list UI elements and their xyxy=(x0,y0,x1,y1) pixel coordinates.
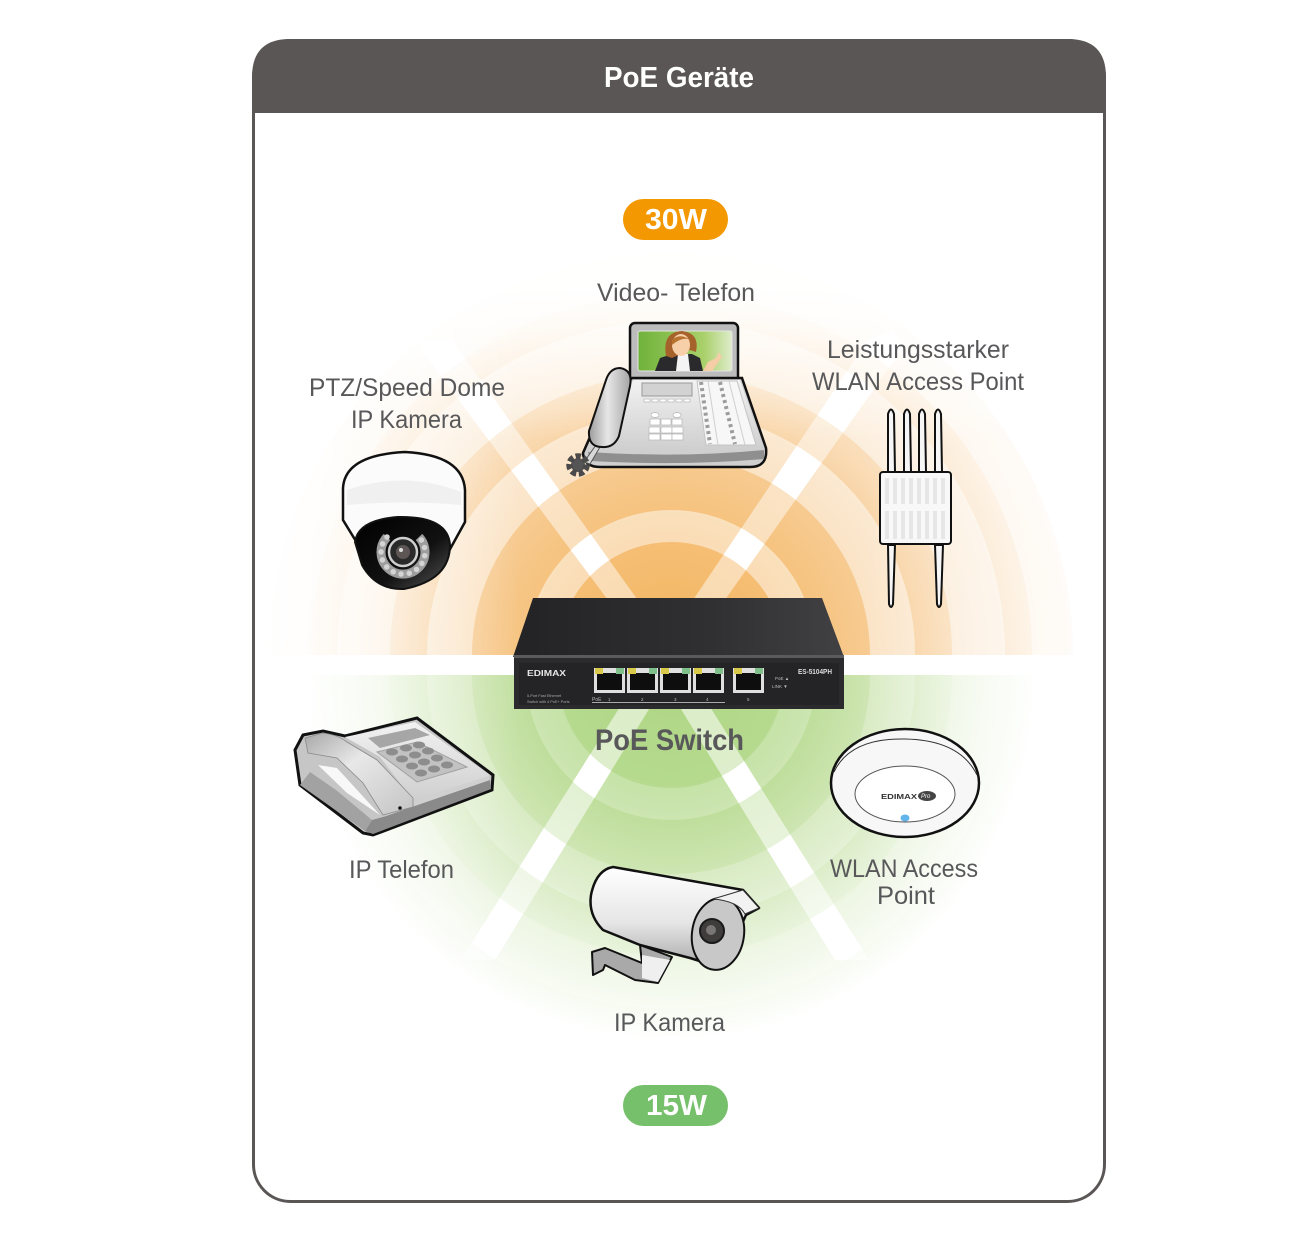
icon: PoE switch: PoE ▲ xyxy=(775,676,789,681)
label: PTZ/Speed Dome IP Kamera: IP Kamera xyxy=(351,406,462,434)
label: PTZ/Speed Dome IP Kamera xyxy=(309,374,505,434)
icon: ceiling WLAN access point xyxy=(831,729,979,837)
label: IP Telefon: IP Telefon xyxy=(349,856,454,884)
badge: 15W: 15W xyxy=(646,1090,708,1122)
title: PoE Geräte xyxy=(604,62,754,94)
panel: outer border xyxy=(254,40,1104,1202)
icon: PoE switch: 2 xyxy=(641,697,644,702)
label: Leistungsstarker WLAN Access Point: Leistungsstarker xyxy=(827,336,1009,364)
infographic: PoE Geräte xyxy=(252,39,1106,1203)
panel: PoE Geräte background xyxy=(254,40,1104,1202)
label: Leistungsstarker WLAN Access Point: WLAN Access Point xyxy=(812,368,1024,396)
icon: PoE switch: 5 xyxy=(747,697,750,702)
badge: 30W: 30W xyxy=(645,204,708,236)
badge: 15W xyxy=(623,1085,728,1126)
icon: outdoor high power access point xyxy=(880,410,951,607)
icon: PoE switch: 5-Port Fast Ethernet xyxy=(527,694,562,698)
icon: PoE switch: 4 xyxy=(706,697,709,702)
label: WLAN Access Point: WLAN Access xyxy=(830,855,978,883)
icon: bullet IP camera xyxy=(590,867,759,983)
icon: IP telephone xyxy=(295,718,493,835)
label: PoE Switch: PoE Switch xyxy=(595,724,744,757)
icon: PoE switch xyxy=(513,598,844,709)
icon: ceiling WLAN access point: Pro xyxy=(921,794,931,800)
icon: ceiling WLAN access point: EDIMAX xyxy=(881,794,917,801)
badge: 30W xyxy=(623,199,728,240)
icon: PoE switch: EDIMAX xyxy=(527,668,566,678)
icon: video telephone xyxy=(570,323,766,474)
orange 30W radiating zone xyxy=(316,314,1066,655)
icon: PoE switch: ES-5104PH xyxy=(798,669,832,676)
label: IP Kamera: IP Kamera xyxy=(614,1009,725,1037)
icon: PoE switch: Switch with 4 PoE+ Ports xyxy=(527,700,570,704)
label: Leistungsstarker WLAN Access Point xyxy=(812,336,1024,396)
icon: PoE switch: 1 xyxy=(608,697,611,702)
icon: PoE switch: LINK ▼ xyxy=(772,684,788,689)
label: PTZ/Speed Dome IP Kamera: PTZ/Speed Dome xyxy=(309,374,505,402)
icon: PoE switch: 3 xyxy=(674,697,677,702)
green 15W radiating zone xyxy=(352,675,1008,1022)
header bar xyxy=(252,39,1106,113)
label: Video-Telefon: Video- Telefon xyxy=(597,279,755,307)
label: WLAN Access Point: Point xyxy=(877,882,935,910)
icon: PoE switch: PoE xyxy=(592,697,602,703)
label: WLAN Access Point xyxy=(830,855,978,910)
icon: dome camera xyxy=(343,452,465,589)
